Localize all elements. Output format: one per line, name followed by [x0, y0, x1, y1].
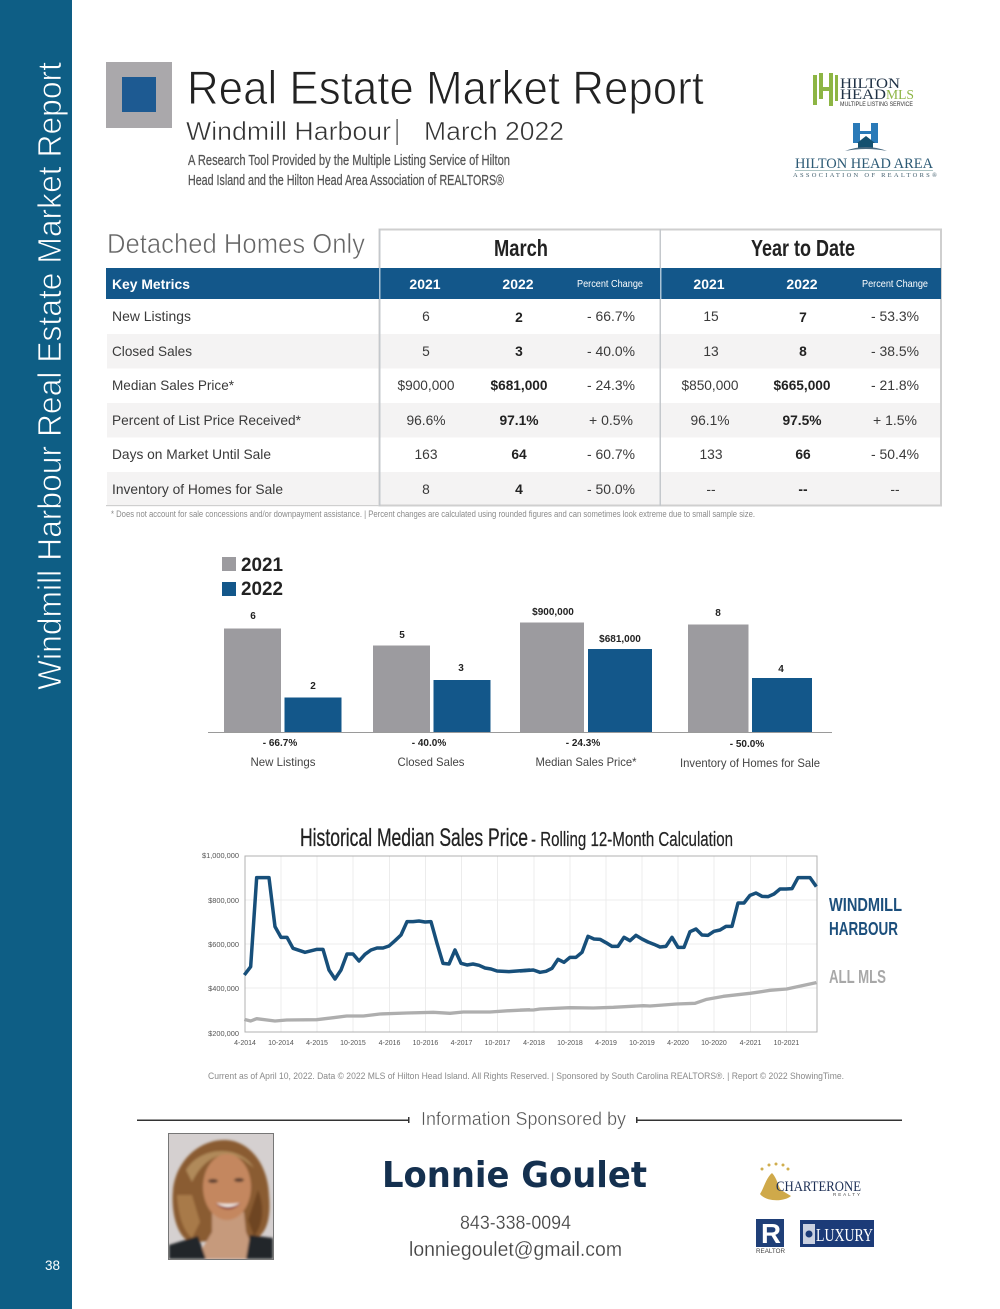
- data source note: Current as of April 10, 2022. Data © 2022 MLS of Hilton Head Island. All Rights Reserved. | Sponsored by South Carolina REALTORS®. | Report © 2022 ShowingTime.: [208, 1071, 844, 1082]
- x-axis labels: 4-2021: [740, 1040, 762, 1047]
- bars: New Listings: [224, 611, 342, 769]
- logo: CharterOne Realty: REALTY: [833, 1192, 860, 1197]
- logo: Luxury: LUXURY: [816, 1225, 873, 1245]
- row: Median Sales Price: - 21.8%: [871, 378, 919, 393]
- bars: Closed Sales: Closed Sales: [398, 755, 464, 769]
- row: New Listings: - 66.7%: [587, 309, 635, 324]
- y-axis labels: $800,000: [208, 896, 239, 905]
- bars: Inventory of Homes for Sale: 4: [778, 664, 784, 675]
- subtitle: March 2022: [424, 116, 564, 146]
- table header row: [106, 268, 941, 299]
- row: Inventory of Homes for Sale: 8: [422, 482, 430, 497]
- x-axis labels: 10-2017: [485, 1040, 510, 1047]
- bars: Closed Sales: 3: [458, 663, 464, 674]
- x-axis labels: 10-2015: [340, 1040, 366, 1047]
- x-axis labels: 10-2020: [701, 1040, 727, 1047]
- row: Median Sales Price: $850,000: [682, 378, 739, 393]
- x-axis labels: 4-2020: [667, 1040, 689, 1047]
- description: Head Island and the Hilton Head Area Association of REALTORS®: [188, 172, 504, 189]
- series: Windmill Harbour: [244, 878, 816, 979]
- x-axis labels: 4-2019: [595, 1040, 617, 1047]
- row: Inventory of Homes for Sale: [112, 482, 900, 497]
- x-axis labels: 4-2015: [306, 1040, 328, 1047]
- row: Closed Sales: - 40.0%: [587, 344, 635, 359]
- row: Inventory of Homes for Sale: - 50.0%: [587, 482, 635, 497]
- row: Percent of List Price Received: + 1.5%: [873, 413, 917, 428]
- logo: Hilton Head Area Association of Realtors: ASSOCIATION OF REALTORS®: [793, 172, 937, 179]
- logo: Realtor: R: [761, 1218, 781, 1249]
- row: Percent of List Price Received: Percent of List Price Received*: [112, 413, 302, 428]
- bars: Closed Sales: - 40.0%: [412, 738, 446, 749]
- row: Median Sales Price: $900,000: [398, 378, 455, 393]
- logo: CharterOne Realty: [760, 1162, 861, 1200]
- table footnote: * Does not account for sale concessions and/or downpayment assistance. | Percent changes are calculated using rounded figures and can sometimes look extreme due to small sample size.: [111, 509, 755, 519]
- logo: Realtor: [756, 1218, 785, 1255]
- y-axis labels: [202, 851, 239, 1038]
- row: New Listings: 6: [422, 309, 430, 324]
- row: Inventory of Homes for Sale: --: [706, 482, 716, 497]
- column group heading: Year to Date: Year to Date: [751, 235, 855, 261]
- row: Days on Market Until Sale: 163: [414, 447, 438, 462]
- y-axis labels: $1,000,000: [202, 851, 239, 860]
- bars: New Listings: 6: [250, 611, 256, 622]
- row: Days on Market Until Sale: 64: [511, 447, 527, 462]
- bars: New Listings: - 66.7%: [263, 738, 297, 749]
- row: Days on Market Until Sale: - 60.7%: [587, 447, 635, 462]
- sidebar title: Windmill Harbour Real Estate Market Report: [31, 62, 68, 690]
- x-axis labels: [234, 1040, 799, 1047]
- x-axis labels: 10-2019: [629, 1040, 655, 1047]
- row: Closed Sales: 8: [799, 344, 807, 359]
- agent phone: 843-338-0094: [460, 1213, 571, 1234]
- x-axis labels: 4-2016: [379, 1040, 401, 1047]
- row: Days on Market Until Sale: - 50.4%: [871, 447, 919, 462]
- row: Percent of List Price Received: 96.1%: [690, 413, 730, 428]
- bars: Median Sales Price: Median Sales Price*: [536, 755, 637, 769]
- row: Median Sales Price: Median Sales Price*: [112, 378, 235, 393]
- row: New Listings: 2: [515, 310, 523, 325]
- logo: Luxury: [800, 1220, 874, 1247]
- bars: Inventory of Homes for Sale: - 50.0%: [730, 739, 764, 750]
- metrics table: [106, 229, 941, 506]
- agent email: lonniegoulet@gmail.com: [409, 1239, 622, 1261]
- bars: Median Sales Price: $681,000: [599, 634, 641, 645]
- row: Closed Sales: - 38.5%: [871, 344, 919, 359]
- line chart legend: ALL MLS: [829, 967, 886, 987]
- description: A Research Tool Provided by the Multiple Listing Service of Hilton: [188, 152, 510, 169]
- table header row: 2021: [409, 276, 441, 292]
- column group heading: March: March: [494, 235, 548, 261]
- y-axis labels: $600,000: [208, 940, 239, 949]
- row: Closed Sales: 3: [515, 344, 523, 359]
- x-axis labels: 10-2014: [268, 1040, 294, 1047]
- row: Days on Market Until Sale: [112, 447, 919, 462]
- line chart: historical median sales price: [202, 851, 817, 1047]
- x-axis labels: 10-2016: [413, 1040, 438, 1047]
- table header row: Key Metrics: [112, 276, 190, 292]
- y-axis labels: $400,000: [208, 984, 239, 993]
- row: Median Sales Price: - 24.3%: [587, 378, 635, 393]
- x-axis labels: 4-2018: [523, 1040, 545, 1047]
- series: All MLS: [244, 983, 816, 1021]
- page number: 38: [45, 1257, 60, 1273]
- logo: Hilton Head MLS: HILTON: [840, 76, 900, 92]
- logo: Hilton Head MLS: MULTIPLE LISTING SERVICE: [840, 102, 913, 108]
- description: [188, 152, 510, 189]
- icon: header square: [106, 62, 172, 128]
- title: Real Estate Market Report: [187, 61, 704, 114]
- x-axis labels: 4-2014: [234, 1040, 256, 1047]
- row: Median Sales Price: $681,000: [490, 378, 548, 393]
- agent name: Lonnie Goulet: [382, 1155, 647, 1196]
- logo: Hilton Head Area Association of Realtors: [793, 123, 937, 179]
- logo: Hilton Head MLS: [813, 73, 914, 108]
- subtitle: [186, 116, 564, 146]
- x-axis labels: 4-2017: [451, 1040, 473, 1047]
- logo: Hilton Head MLS: MLS: [886, 88, 914, 103]
- bars: Median Sales Price: - 24.3%: [566, 738, 600, 749]
- subtitle: Windmill Harbour: [186, 116, 391, 146]
- row: New Listings: - 53.3%: [871, 309, 919, 324]
- line chart legend: WINDMILL: [829, 895, 902, 915]
- sidebar: [0, 0, 72, 1309]
- line chart legend: HARBOUR: [829, 919, 898, 939]
- x-axis labels: 10-2018: [557, 1040, 583, 1047]
- line chart title: - Rolling 12-Month Calculation: [531, 829, 733, 851]
- bar chart legend: 2021: [241, 555, 283, 576]
- table header row: 2022: [786, 276, 818, 292]
- table header row: Percent Change: [862, 278, 928, 290]
- y-axis labels: $200,000: [208, 1029, 239, 1038]
- bars: Closed Sales: 5: [399, 630, 405, 641]
- logo: Hilton Head MLS: HEAD: [840, 87, 886, 103]
- bars: Median Sales Price: [520, 607, 652, 769]
- row: Days on Market Until Sale: Days on Market Until Sale: [112, 447, 271, 462]
- agent photo: [168, 1134, 274, 1260]
- row: New Listings: 7: [799, 310, 807, 325]
- table header row: 2021: [693, 276, 725, 292]
- bars: New Listings: 2: [310, 681, 316, 692]
- row: New Listings: [112, 309, 919, 325]
- row: Inventory of Homes for Sale: Inventory of Homes for Sale: [112, 482, 283, 497]
- bars: Inventory of Homes for Sale: [680, 608, 820, 770]
- row: Inventory of Homes for Sale: --: [798, 482, 808, 497]
- row: Closed Sales: 13: [703, 344, 719, 359]
- logo: Hilton Head Area Association of Realtors: HILTON HEAD AREA: [795, 156, 933, 172]
- row: Closed Sales: Closed Sales: [112, 344, 192, 359]
- row: Inventory of Homes for Sale: --: [890, 482, 900, 497]
- row: Closed Sales: [112, 344, 919, 359]
- row: New Listings: New Listings: [112, 309, 191, 324]
- bars: Inventory of Homes for Sale: Inventory of Homes for Sale: [680, 756, 820, 770]
- row: Percent of List Price Received: + 0.5%: [589, 413, 633, 428]
- bars: New Listings: New Listings: [250, 755, 316, 769]
- row: Days on Market Until Sale: 133: [699, 447, 723, 462]
- bar chart legend: 2022: [241, 579, 283, 600]
- bars: Closed Sales: [373, 630, 490, 769]
- table header row: Percent Change: [577, 278, 643, 290]
- bar chart: [208, 607, 832, 770]
- line chart legend: [829, 895, 902, 987]
- bars: Median Sales Price: $900,000: [532, 607, 574, 618]
- row: Days on Market Until Sale: 66: [795, 447, 811, 462]
- row: Median Sales Price: $665,000: [774, 378, 831, 393]
- logo: Realtor: REALTOR: [756, 1248, 785, 1255]
- row: Closed Sales: 5: [422, 344, 430, 359]
- bars: Inventory of Homes for Sale: 8: [715, 608, 721, 619]
- bar chart legend: [222, 555, 283, 600]
- row: Percent of List Price Received: 97.5%: [782, 413, 822, 428]
- row: Inventory of Homes for Sale: 4: [515, 482, 523, 497]
- row: Median Sales Price: [112, 378, 919, 393]
- row: New Listings: 15: [703, 309, 719, 324]
- logo: CharterOne Realty: CHARTERONE: [776, 1179, 861, 1195]
- line chart title: Historical Median Sales Price: [300, 824, 528, 852]
- x-axis labels: 10-2021: [774, 1040, 799, 1047]
- row: Percent of List Price Received: [112, 413, 917, 428]
- row: Percent of List Price Received: 97.1%: [499, 413, 539, 428]
- heading: Detached Homes Only: Detached Homes Only: [107, 228, 365, 259]
- table header row: 2022: [502, 276, 534, 292]
- row: Percent of List Price Received: 96.6%: [406, 413, 446, 428]
- sponsor divider: Information Sponsored by: [421, 1109, 626, 1129]
